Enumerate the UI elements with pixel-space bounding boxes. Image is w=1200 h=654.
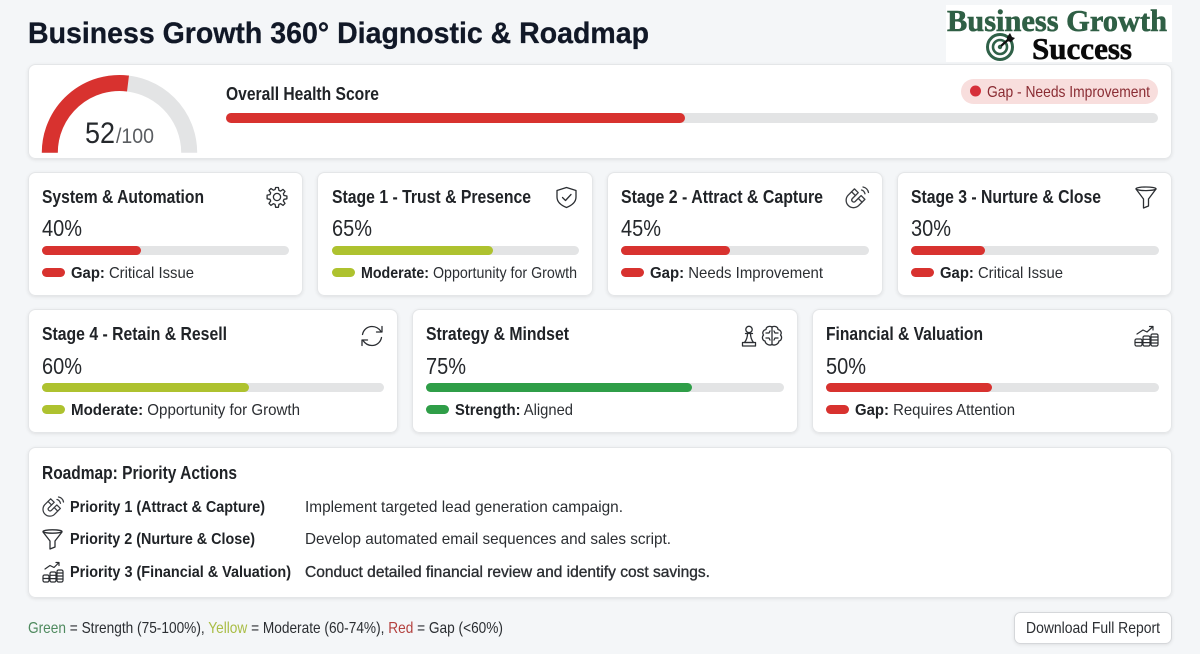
panel: stage 4: Moderate: Opportunity for Growth: [71, 402, 300, 419]
logo: Business Growth Success: [946, 3, 1172, 66]
panel: financial and valuation: Gap: Requires Attention: [855, 402, 1015, 419]
icon: funnel: [1136, 187, 1156, 208]
priority 3 row: Conduct detailed financial review and identify cost savings.: [305, 564, 710, 581]
icon: coins with growth chart: [1135, 326, 1158, 346]
heading: roadmap: Roadmap: Priority Actions: [42, 463, 237, 483]
panel: stage 2: Stage 2 - Attract & Capture: [621, 187, 823, 207]
gauge: 52 out of 100: 52: [85, 117, 115, 150]
icon: magnet: [846, 187, 868, 208]
panel: stage 3: 30%: [911, 215, 951, 241]
panel: stage 4: [28, 310, 398, 432]
icon: coins with growth chart: [43, 562, 63, 582]
icon: refresh arrows: [362, 326, 382, 346]
panel: financial and valuation: 50%: [826, 353, 866, 379]
button: download full report: [1014, 612, 1172, 644]
title: Business Growth 360° Diagnostic & Roadmap: [28, 17, 649, 50]
panel: strategy and mindset: Strength: Aligned: [455, 402, 573, 419]
panel: overall health score: [28, 64, 1172, 158]
status pill: gap: Gap - Needs Improvement: [987, 84, 1150, 101]
panel: stage 4: Stage 4 - Retain & Resell: [42, 324, 227, 344]
panel: financial and valuation: [812, 310, 1172, 432]
status pill: gap: [961, 79, 1158, 104]
button: download full report: Download Full Report: [1026, 620, 1160, 637]
logo: Business Growth Success: Success: [1032, 31, 1132, 66]
icon: target with arrow: [988, 33, 1015, 60]
panel: stage 2: [608, 172, 882, 296]
gauge: 52 out of 100: /100: [116, 125, 154, 148]
panel: stage 2: 45%: [621, 215, 661, 241]
panel: stage 1: [318, 172, 592, 296]
logo: Business Growth Success: Business Growth: [947, 3, 1167, 38]
panel: stage 1: 65%: [332, 215, 372, 241]
icon: funnel: [43, 530, 62, 549]
priority 2 row: Priority 2 (Nurture & Close): [70, 531, 255, 548]
panel: system and automation: [28, 172, 302, 296]
panel: stage 4: 60%: [42, 353, 82, 379]
priority 3 row: Priority 3 (Financial & Valuation): [70, 564, 291, 581]
priority 2 row: [43, 530, 671, 549]
gauge: 52 out of 100: [50, 83, 189, 153]
priority 2 row: Develop automated email sequences and sales script.: [305, 531, 671, 548]
panel: stage 3: Gap: Critical Issue: [940, 265, 1063, 282]
icon: chess pawn: [742, 326, 756, 346]
heading: overall health score: Overall Health Score: [226, 84, 379, 104]
panel: system and automation: System & Automation: [42, 187, 204, 207]
icon: brain: [762, 326, 782, 345]
panel: stage 3: [898, 172, 1172, 296]
panel: roadmap priority actions: [28, 448, 1172, 598]
priority 1 row: Implement targeted lead generation campaign.: [305, 499, 623, 516]
icon: shield check: [557, 188, 576, 208]
colour legend: Green = Strength (75-100%), Yellow = Moderate (60-74%), Red = Gap (<60%): [28, 620, 503, 637]
icon: gear: [267, 188, 287, 207]
priority 3 row: [43, 562, 710, 582]
priority 1 row: Priority 1 (Attract & Capture): [70, 499, 265, 516]
panel: system and automation: Gap: Critical Issue: [71, 265, 194, 282]
panel: strategy and mindset: Strategy & Mindset: [426, 324, 569, 344]
icon: magnet: [43, 497, 64, 516]
panel: strategy and mindset: [412, 310, 798, 432]
progress bar: overall: [226, 113, 1158, 123]
panel: financial and valuation: Financial & Valuation: [826, 324, 983, 344]
priority 1 row: [43, 497, 623, 516]
panel: stage 3: Stage 3 - Nurture & Close: [911, 187, 1101, 207]
panel: stage 1: Stage 1 - Trust & Presence: [332, 187, 531, 207]
panel: system and automation: 40%: [42, 215, 82, 241]
panel: strategy and mindset: 75%: [426, 353, 466, 379]
panel: stage 1: Moderate: Opportunity for Growth: [361, 265, 577, 282]
panel: stage 2: Gap: Needs Improvement: [650, 265, 824, 282]
